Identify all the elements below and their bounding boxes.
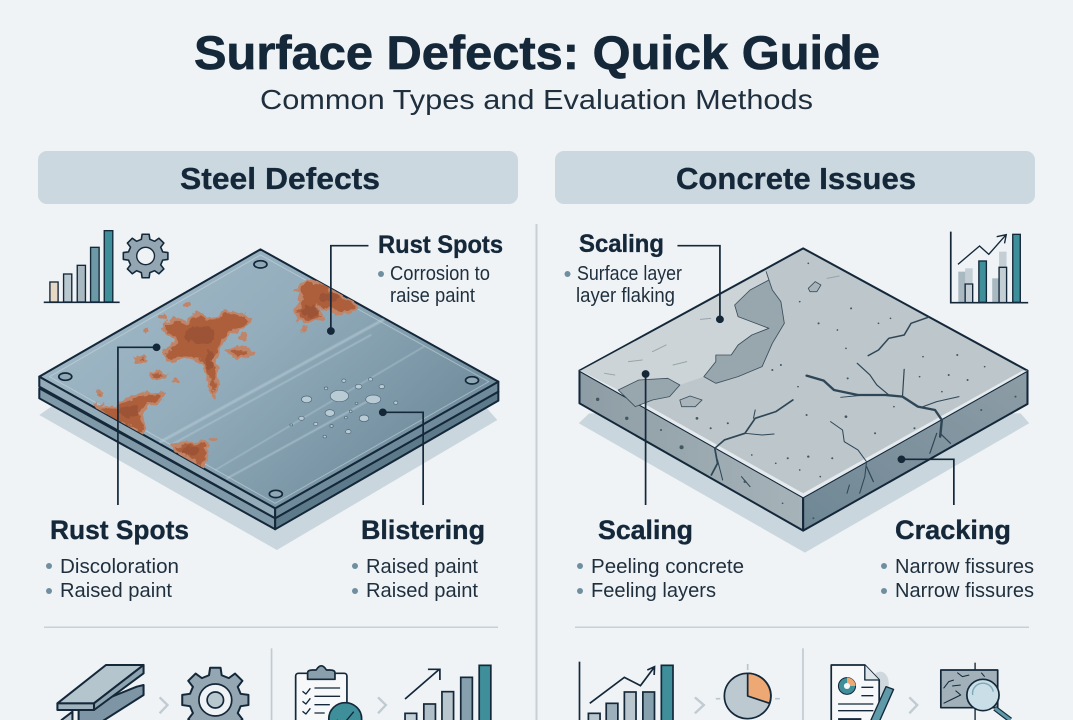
icon: magnified cracked sample bbox=[941, 663, 1010, 720]
panel header: concrete issues: Concrete Issues bbox=[676, 161, 916, 196]
panel: steel defects bbox=[39, 231, 503, 720]
icon: chevron bbox=[378, 697, 386, 713]
icon: report and pencil bbox=[831, 665, 894, 720]
callout: cracking: Cracking bbox=[895, 515, 1011, 545]
callout: blistering: Blistering bbox=[361, 515, 485, 545]
icon: bars and gear bbox=[44, 231, 168, 302]
callout: rust spots: Discoloration bbox=[60, 556, 179, 578]
callout: rust spots bbox=[46, 515, 189, 602]
callout: scaling top: Surface layer bbox=[577, 263, 682, 285]
icon: clipboard bbox=[296, 666, 362, 720]
divider bbox=[802, 648, 804, 720]
concrete slab illustration bbox=[579, 248, 1029, 553]
panel header: concrete issues bbox=[555, 151, 1035, 204]
leader lines and anchors: concrete bbox=[643, 246, 954, 505]
scaling texture bbox=[604, 276, 839, 375]
icon: chevron bbox=[160, 697, 167, 713]
icon: pie chart bbox=[716, 664, 780, 719]
panel header: steel defects: Steel Defects bbox=[180, 161, 380, 196]
callout: rust spots: Raised paint bbox=[60, 580, 172, 602]
rust patches bbox=[96, 280, 357, 468]
subtitle: Common Types and Evaluation Methods bbox=[260, 84, 813, 115]
panel header: steel defects bbox=[38, 151, 518, 204]
cracks bbox=[711, 317, 959, 493]
steel plate illustration bbox=[39, 249, 498, 550]
callout: rust spots top bbox=[378, 231, 503, 307]
callout: scaling: Feeling layers bbox=[591, 580, 716, 602]
icon: gear bbox=[182, 668, 248, 720]
process icons: steel bbox=[57, 648, 491, 720]
leader lines and anchors: steel bbox=[118, 246, 423, 505]
icon: growth chart bbox=[579, 662, 673, 720]
icon: chevron bbox=[695, 697, 704, 713]
callout: scaling top: layer flaking bbox=[576, 285, 675, 307]
callout: rust spots top: Rust Spots bbox=[378, 231, 503, 259]
flaked region bbox=[581, 271, 769, 390]
icon: trend chart bbox=[951, 232, 1028, 303]
aggregate speckles bbox=[596, 262, 1017, 519]
process icons: concrete bbox=[579, 648, 1010, 720]
callout: cracking: Narrow fissures bbox=[895, 580, 1034, 602]
exposed scaling bbox=[618, 272, 821, 407]
callout: blistering bbox=[352, 515, 485, 602]
callout: scaling: Peeling concrete bbox=[591, 556, 744, 578]
callout: rust spots top: raise paint bbox=[390, 285, 475, 307]
callout: cracking: Narrow fissures bbox=[895, 556, 1034, 578]
icon: chevron bbox=[909, 697, 917, 713]
callout: cracking bbox=[881, 515, 1034, 602]
blister droplets bbox=[290, 378, 398, 438]
callout: rust spots top: Corrosion to bbox=[390, 263, 490, 285]
divider bbox=[271, 648, 272, 720]
callout: scaling top bbox=[564, 230, 682, 307]
panel: concrete issues bbox=[564, 230, 1034, 720]
callout: scaling: Scaling bbox=[598, 515, 693, 545]
callout: scaling top: Scaling bbox=[579, 230, 664, 258]
callout: rust spots: Rust Spots bbox=[50, 515, 189, 545]
callout: blistering: Raised paint bbox=[366, 580, 478, 602]
callout: blistering: Raised paint bbox=[366, 556, 478, 578]
icon: rising bars bbox=[405, 665, 491, 720]
title: Surface Defects: Quick Guide bbox=[194, 26, 880, 79]
bolt holes bbox=[59, 261, 479, 498]
icon: steel beam bbox=[57, 665, 144, 720]
callout: scaling bbox=[577, 515, 744, 602]
